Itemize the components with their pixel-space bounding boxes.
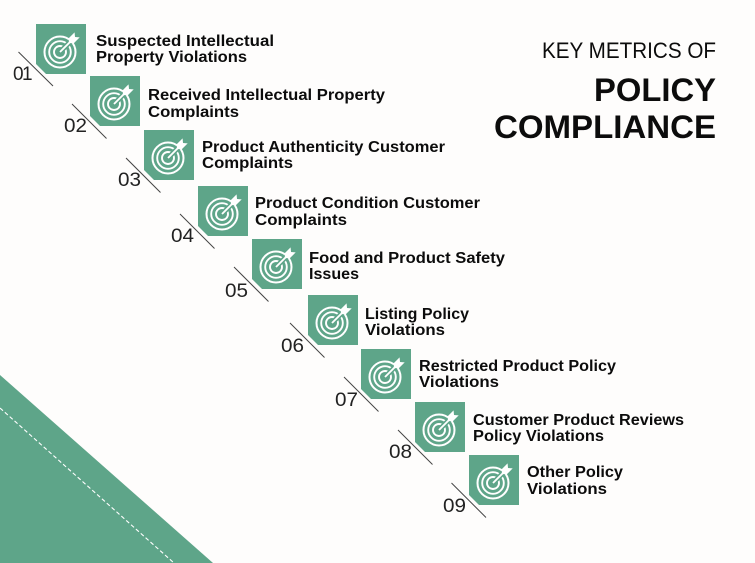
title: POLICY xyxy=(594,72,716,108)
item 06: 06 xyxy=(281,336,304,357)
item 06: Violations xyxy=(365,322,445,339)
title: COMPLIANCE xyxy=(494,109,716,145)
item 04: Product Condition Customer xyxy=(255,195,480,212)
item 05: Food and Product Safety xyxy=(309,250,505,267)
title xyxy=(494,38,716,145)
item 02: 02 xyxy=(64,116,87,137)
item 07: Violations xyxy=(419,374,499,391)
item 09 xyxy=(443,455,623,518)
item 07 xyxy=(335,349,616,412)
item 02 xyxy=(64,76,385,138)
item 01: Property Violations xyxy=(96,49,247,66)
item 03 xyxy=(118,130,445,192)
item 03: Complaints xyxy=(202,155,293,172)
item 08 xyxy=(389,402,684,464)
item 07: Restricted Product Policy xyxy=(419,358,616,375)
item 08: Policy Violations xyxy=(473,428,604,445)
decorative green corner triangle xyxy=(0,375,213,563)
item 09: 09 xyxy=(443,496,466,517)
item 02: Received Intellectual Property xyxy=(148,87,385,104)
item 05: 05 xyxy=(225,281,248,302)
title: KEY METRICS OF xyxy=(542,38,716,63)
item 06: Listing Policy xyxy=(365,306,469,323)
item 03: Product Authenticity Customer xyxy=(202,139,445,156)
item 09: Violations xyxy=(527,481,607,498)
item 09: Other Policy xyxy=(527,464,623,481)
item 08: 08 xyxy=(389,442,412,463)
item 08: Customer Product Reviews xyxy=(473,412,684,429)
item 01 xyxy=(13,24,274,86)
item 04: Complaints xyxy=(255,212,347,229)
item 04: 04 xyxy=(171,226,194,247)
item 03: 03 xyxy=(118,170,141,191)
item 01: Suspected Intellectual xyxy=(96,33,274,50)
item 05 xyxy=(225,239,505,302)
item 07: 07 xyxy=(335,390,358,411)
item 01: 01 xyxy=(13,64,33,85)
item 06 xyxy=(281,295,469,358)
item 02: Complaints xyxy=(148,104,239,121)
item 05: Issues xyxy=(309,266,359,283)
item 04 xyxy=(171,186,480,248)
